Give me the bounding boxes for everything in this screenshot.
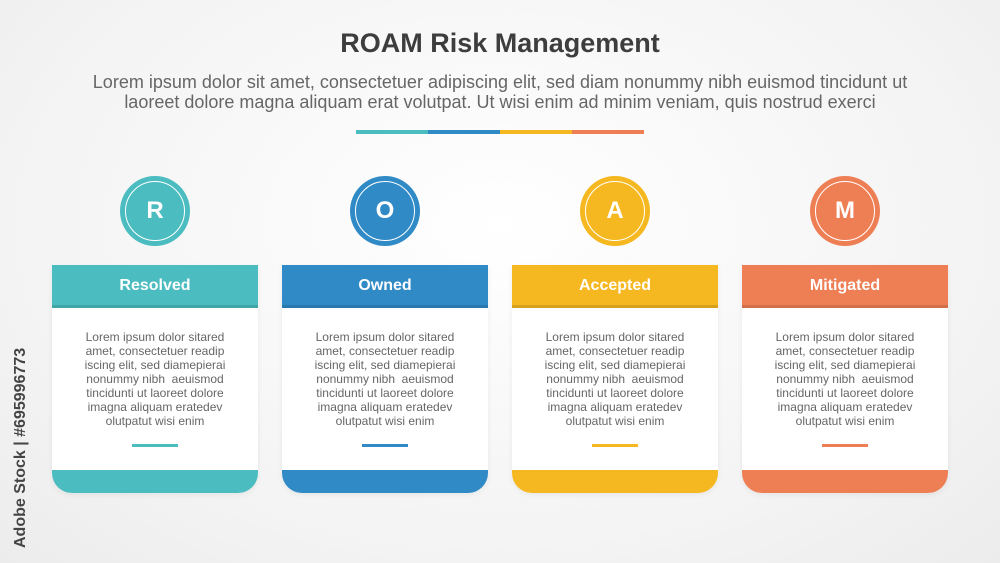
icon: R circle: R bbox=[146, 197, 164, 224]
icon: A circle bbox=[580, 176, 650, 246]
panel: Mitigated: nonummy nibh aeuismod bbox=[776, 372, 914, 386]
panel: Owned bbox=[282, 265, 488, 493]
panel: Owned: Lorem ipsum dolor sitared bbox=[316, 330, 454, 344]
panel: Accepted: Accepted bbox=[579, 277, 651, 294]
panel: Mitigated: imagna aliquam eratedev bbox=[778, 400, 912, 414]
panel: Accepted: imagna aliquam eratedev bbox=[548, 400, 682, 414]
subtitle text bbox=[93, 72, 908, 112]
title: ROAM Risk Management bbox=[340, 28, 660, 58]
panel: Owned: tincidunti ut laoreet dolore bbox=[316, 386, 454, 400]
panel: Mitigated: iscing elit, sed diamepierai bbox=[775, 358, 915, 372]
panel: Accepted: olutpatut wisi enim bbox=[566, 414, 664, 428]
panel: Accepted: Lorem ipsum dolor sitared bbox=[546, 330, 684, 344]
icon: R circle bbox=[120, 176, 190, 246]
panel: Resolved: Lorem ipsum dolor sitared bbox=[86, 330, 224, 344]
panel: Mitigated: olutpatut wisi enim bbox=[796, 414, 894, 428]
icon: A circle: A bbox=[606, 197, 624, 224]
panel: Resolved: imagna aliquam eratedev bbox=[88, 400, 222, 414]
panel: Accepted: nonummy nibh aeuismod bbox=[546, 372, 684, 386]
divider bar bbox=[356, 130, 644, 134]
subtitle text: laoreet dolore magna aliquam erat volutpat. Ut wisi enim ad minim veniam, quis nostrud exerci bbox=[124, 92, 876, 112]
subtitle text: Lorem ipsum dolor sit amet, consectetuer adipiscing elit, sed diam nonummy nibh euismod tincidunt ut bbox=[93, 72, 907, 92]
panel: Accepted: amet, consectetuer readip bbox=[546, 344, 684, 358]
panel: Mitigated: Lorem ipsum dolor sitared bbox=[776, 330, 914, 344]
panel: Accepted bbox=[512, 265, 718, 493]
panel: Resolved: olutpatut wisi enim bbox=[106, 414, 204, 428]
panel: Mitigated: amet, consectetuer readip bbox=[776, 344, 914, 358]
icon: M circle: M bbox=[835, 197, 855, 224]
panel: Owned: iscing elit, sed diamepierai bbox=[315, 358, 455, 372]
panel: Resolved bbox=[52, 265, 258, 493]
panel: Mitigated: tincidunti ut laoreet dolore bbox=[776, 386, 914, 400]
icon: O circle: O bbox=[376, 197, 394, 224]
panel: Owned: olutpatut wisi enim bbox=[336, 414, 434, 428]
panel: Owned: amet, consectetuer readip bbox=[316, 344, 454, 358]
panel: Resolved: nonummy nibh aeuismod bbox=[86, 372, 224, 386]
panel: Mitigated bbox=[742, 265, 948, 493]
icon: M circle bbox=[810, 176, 880, 246]
panel: Accepted: tincidunti ut laoreet dolore bbox=[546, 386, 684, 400]
panel: Accepted: iscing elit, sed diamepierai bbox=[545, 358, 685, 372]
panel: Owned: imagna aliquam eratedev bbox=[318, 400, 452, 414]
panel: Owned: Owned bbox=[358, 277, 412, 294]
panel: Resolved: Resolved bbox=[119, 277, 191, 294]
icon: O circle bbox=[350, 176, 420, 246]
panel: Owned: nonummy nibh aeuismod bbox=[316, 372, 454, 386]
panel: Mitigated: Mitigated bbox=[810, 277, 880, 294]
panel: Resolved: iscing elit, sed diamepierai bbox=[85, 358, 225, 372]
panel: Resolved: tincidunti ut laoreet dolore bbox=[86, 386, 224, 400]
side watermark text: Adobe Stock | #695996773 bbox=[12, 348, 29, 548]
panel: Resolved: amet, consectetuer readip bbox=[86, 344, 224, 358]
